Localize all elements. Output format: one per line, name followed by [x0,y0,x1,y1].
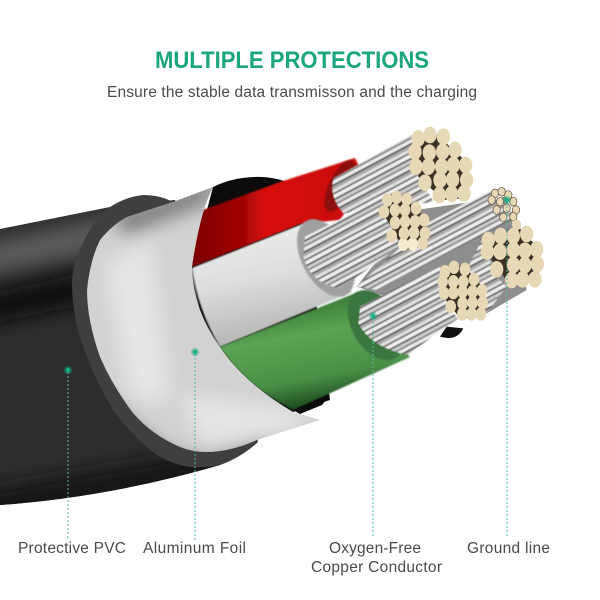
outer PVC jacket [0,200,258,505]
callout: ground line: Ground line [467,540,550,557]
callout: ground line [467,196,550,557]
callout: protective PVC: Protective PVC [18,540,126,557]
cable illustration [0,127,544,530]
callout: aluminum foil [143,348,246,557]
callout: oxygen-free copper conductor [311,312,442,576]
aluminum foil [87,187,320,452]
callout: protective PVC [18,366,126,557]
title: MULTIPLE PROTECTIONS [155,47,429,74]
strand filler [357,197,527,313]
conductor: red wire [332,127,473,213]
jacket cut ring [72,195,300,467]
callout: oxygen-free copper conductor: Copper Conductor [311,559,442,576]
conductor: back [357,187,520,290]
opening interior [192,177,330,412]
callout: aluminum foil: Aluminum Foil [143,540,246,557]
subtitle: Ensure the stable data transmisson and the charging [107,84,477,101]
green wire [220,280,416,414]
copper strands and conductors [303,127,544,355]
conductor: right [460,220,544,313]
red wire [192,156,366,267]
callout: oxygen-free copper conductor: Oxygen-Free [329,540,421,557]
grey wire [192,210,367,347]
conductor: grey wire [303,191,430,288]
conductor: green wire [358,261,488,355]
